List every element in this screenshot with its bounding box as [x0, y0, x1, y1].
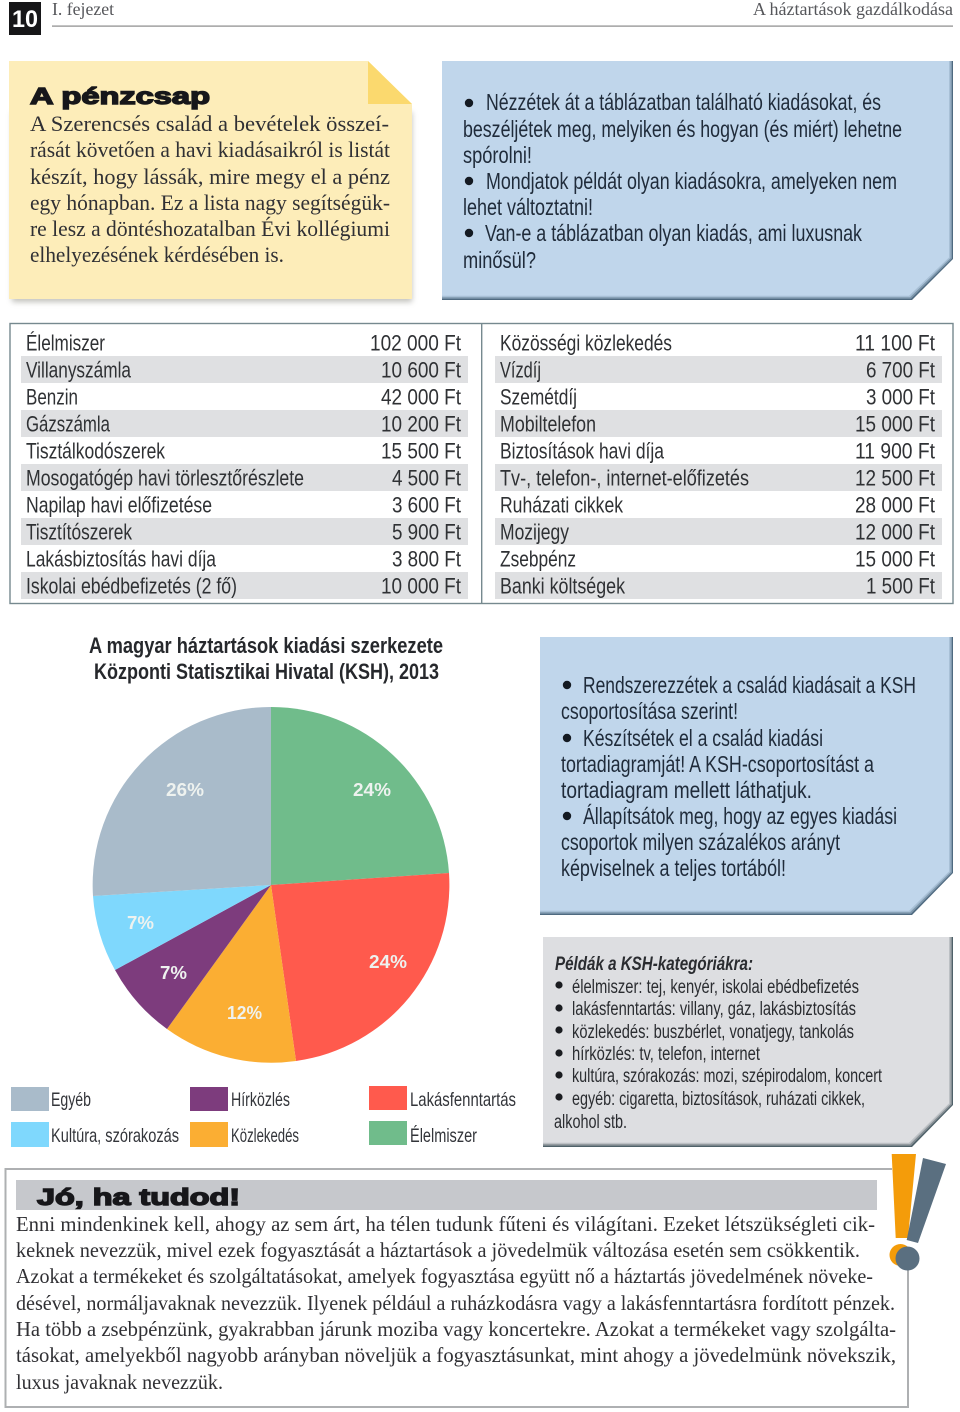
table right column: 28 000 Ft: [855, 492, 935, 518]
table left column: 5 900 Ft: [392, 520, 461, 544]
table left column: [26, 330, 461, 598]
note text: egy hónapban. Ez a lista nagy segítségük-: [30, 190, 390, 215]
legend: Lakásfenntartás: [410, 1089, 516, 1111]
examples list: egyéb: cigaretta, biztosítások, ruházati cikkek,: [572, 1089, 865, 1110]
table right column: 15 000 Ft: [855, 546, 935, 572]
table right column: Szemétdíj: [500, 384, 577, 410]
legend: [11, 1086, 516, 1147]
legend: Élelmiszer: [410, 1124, 477, 1147]
table left column: 42 000 Ft: [381, 384, 461, 410]
legend: Kultúra, szórakozás: [51, 1125, 179, 1147]
box text: tásokat, amelyekből nagyobb arányban növeljük a fogyasztásunkat, mint ahogy a jövedelmünk növekszik,: [16, 1343, 896, 1367]
table left column: 10 000 Ft: [381, 574, 461, 598]
table left column: 3 600 Ft: [392, 492, 461, 518]
table left column: Gázszámla: [26, 412, 111, 436]
task list: csoportosítása szerint!: [561, 698, 738, 724]
table right column: 1 500 Ft: [866, 574, 935, 598]
folded corner: [368, 61, 412, 104]
table left column: 10 200 Ft: [381, 412, 461, 436]
panel: discussion questions: [442, 61, 953, 300]
table right column: Mobiltelefon: [500, 412, 596, 436]
task list: Készítsétek el a család kiadási: [583, 725, 823, 751]
pie value labels: 7%: [127, 913, 154, 933]
table right column: Biztosítások havi díja: [500, 438, 665, 464]
slice: Hírközlés 7%: [115, 885, 271, 1029]
table right column: 12 500 Ft: [855, 466, 935, 490]
task list: tortadiagram mellett láthatjuk.: [561, 777, 812, 803]
slice: Kultúra, szórakozás 7%: [93, 885, 271, 970]
table left column: 10 600 Ft: [381, 358, 461, 382]
examples heading: Példák a KSH-kategóriákra:: [555, 954, 753, 975]
table left column: 102 000 Ft: [370, 330, 461, 356]
panel: pie chart tasks: [540, 637, 953, 915]
box text: keknek nevezzük, mivel ezek fogyasztását a háztartások a jövedelmük változása esetén sem csökkentik.: [16, 1238, 860, 1262]
table left column: Villanyszámla: [26, 358, 132, 382]
examples list: hírközlés: tv, telefon, internet: [572, 1044, 761, 1065]
expense table: [10, 324, 953, 604]
table left column: 15 500 Ft: [381, 438, 461, 464]
table right column: Banki költségek: [500, 574, 626, 598]
slice: Élelmiszer 24%: [271, 707, 449, 885]
pie value labels: [127, 780, 407, 1023]
examples list: élelmiszer: tej, kenyér, iskolai ebédbefizetés: [572, 977, 859, 998]
question list: [463, 89, 902, 273]
table left column: Élelmiszer: [26, 330, 105, 356]
page number: [9, 2, 41, 35]
examples list: lakásfenntartás: villany, gáz, lakásbiztosítás: [572, 999, 856, 1020]
question list: spórolni!: [463, 142, 532, 168]
note text: elhelyezésének kérdésében is.: [30, 242, 284, 267]
pie value labels: 24%: [369, 952, 407, 972]
slice: Közlekedés 12%: [167, 885, 296, 1063]
pie value labels: 12%: [227, 1003, 262, 1023]
box text: Enni mindenkinek kell, ahogy az sem árt, ha télen tudunk fűteni és világítani. Ezeket létszükségleti cik-: [16, 1212, 875, 1236]
panel: Jó, ha tudod: [6, 1169, 908, 1407]
box text: [16, 1212, 896, 1394]
page header: [9, 0, 953, 35]
legend: Hírközlés: [231, 1089, 290, 1111]
chart title: A magyar háztartások kiadási szerkezete: [89, 633, 443, 658]
panel: A pénzcsap note: [9, 61, 412, 302]
question list: Van-e a táblázatban olyan kiadás, ami luxusnak: [485, 220, 862, 246]
page number: 10: [12, 6, 38, 33]
table left column: Iskolai ebédbefizetés (2 fő): [26, 574, 237, 598]
note text: re lesz a döntéshozatalban Évi kollégiumi: [30, 216, 390, 241]
table right column: 12 000 Ft: [855, 520, 935, 544]
box text: Azokat a termékeket és szolgáltatásokat, amelyek fogyasztása együtt nő a háztartás jövedelmének növeke-: [16, 1264, 873, 1288]
pie chart: [93, 707, 449, 1063]
table right column: Ruházati cikkek: [500, 492, 624, 518]
note text: A Szerencsés család a bevételek összeí-: [30, 111, 389, 136]
table right column: 15 000 Ft: [855, 412, 935, 436]
task list: csoportok milyen százalékos arányt: [561, 829, 840, 855]
examples list: [554, 977, 883, 1133]
slice: Lakásfenntartás 24%: [271, 873, 449, 1061]
table right column: 11 100 Ft: [855, 330, 935, 356]
box text: Ha több a zsebpénzünk, gyakrabban járunk moziba vagy koncertekre. Azokat a termékeket vagy szolgálta-: [16, 1317, 896, 1341]
task list: [561, 672, 916, 881]
table right column: Zsebpénz: [500, 546, 576, 572]
table left column: Tisztítószerek: [26, 520, 133, 544]
examples list: közlekedés: buszbérlet, vonatjegy, tankolás: [572, 1022, 854, 1043]
table left column: 4 500 Ft: [392, 466, 461, 490]
table right column: 3 000 Ft: [866, 384, 935, 410]
chart title: [89, 633, 443, 684]
table right column: Tv-, telefon-, internet-előfizetés: [500, 466, 749, 490]
box heading: Jó, ha tudod!: [37, 1184, 240, 1210]
examples list: alkohol stb.: [554, 1112, 627, 1133]
table left column: Lakásbiztosítás havi díja: [26, 546, 217, 572]
slice: Egyéb 26%: [93, 707, 271, 896]
question list: minősül?: [463, 247, 536, 273]
pie value labels: 7%: [160, 963, 187, 983]
chart title: Központi Statisztikai Hivatal (KSH), 2013: [94, 659, 439, 684]
legend: Közlekedés: [231, 1125, 299, 1147]
note heading: A pénzcsap: [30, 83, 210, 109]
table left column: 3 800 Ft: [392, 546, 461, 572]
task list: tortadiagramját! A KSH-csoportosítást a: [561, 751, 874, 777]
table right column: [500, 330, 935, 598]
table left column: Tisztálkodószerek: [26, 438, 166, 464]
box text: luxus javaknak nevezzük.: [16, 1370, 223, 1394]
table left column: Mosogatógép havi törlesztőrészlete: [26, 466, 304, 490]
table right column: 11 900 Ft: [855, 438, 935, 464]
table right column: Közösségi közlekedés: [500, 330, 672, 356]
note text: [30, 111, 391, 267]
table left column: Napilap havi előfizetése: [26, 492, 212, 518]
legend: Egyéb: [51, 1089, 91, 1111]
pie value labels: 24%: [353, 780, 391, 800]
note text: rását követően a havi kiadásaikról is listát: [30, 137, 391, 162]
table right column: Vízdíj: [500, 358, 541, 382]
task list: képviselnek a teljes tortából!: [561, 855, 786, 881]
question list: lehet változtatni!: [463, 194, 593, 220]
table right column: Mozijegy: [500, 520, 569, 544]
table right column: 6 700 Ft: [866, 358, 935, 382]
pie value labels: 26%: [166, 780, 204, 800]
note text: készít, hogy lássák, mire megy el a pénz: [30, 164, 390, 189]
icon: exclamation marks: [890, 1154, 946, 1270]
box text: désével, normáljavaknak nevezzük. Ilyenek például a ruházkodásra vagy a lakásfenntartásra fordított pénzek.: [16, 1291, 895, 1315]
table left column: Benzin: [26, 384, 78, 410]
panel: KSH category examples: [543, 937, 953, 1147]
